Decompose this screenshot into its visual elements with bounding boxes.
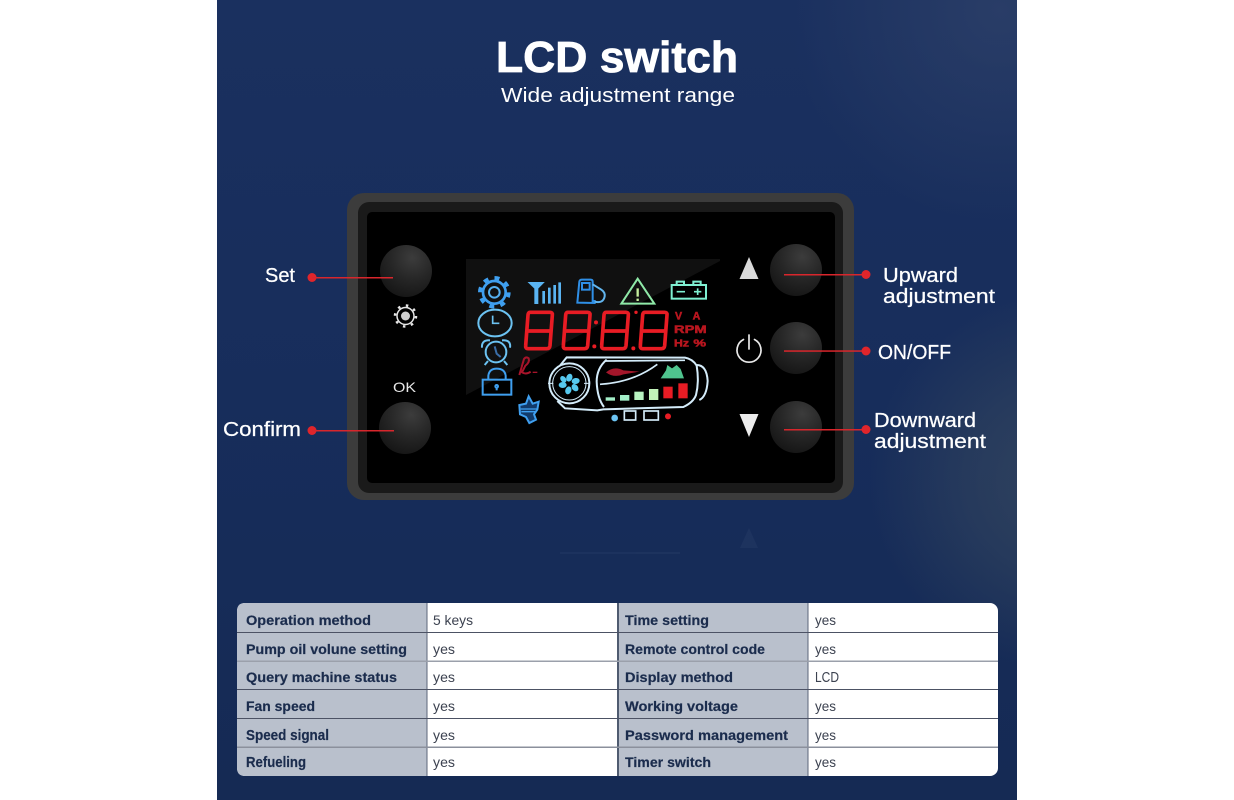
unit labels: Hz xyxy=(674,338,689,349)
callout: ON/OFF xyxy=(784,342,951,364)
level bars xyxy=(606,383,688,401)
unit labels: % xyxy=(693,338,706,349)
button: on/off xyxy=(770,322,822,374)
left value column: yes xyxy=(433,727,455,743)
icon: down arrow xyxy=(740,414,758,437)
callout: ON/OFF: ON/OFF xyxy=(878,342,951,364)
icon: signal xyxy=(528,282,560,304)
callout: Downward adjustment: adjustment xyxy=(874,431,986,453)
right label column: Password management xyxy=(625,727,788,743)
left label column: Query machine status xyxy=(246,669,397,685)
background panel xyxy=(217,0,1017,800)
unit labels: A xyxy=(693,310,701,322)
left value column: 5 keys xyxy=(433,612,473,628)
icon: clock xyxy=(478,310,512,336)
icon: fuel drop symbol xyxy=(519,396,539,423)
callout: Confirm: Confirm xyxy=(223,419,301,441)
icon: settings gear xyxy=(395,306,416,326)
unit labels: V xyxy=(675,310,683,322)
spec table xyxy=(237,603,998,776)
icon: gear xyxy=(480,278,509,307)
left label column xyxy=(246,612,407,771)
right label column: Remote control code xyxy=(625,641,765,657)
device housing xyxy=(347,193,854,500)
icon: battery xyxy=(672,282,706,299)
left label column: Refueling xyxy=(246,755,306,771)
right value column: yes xyxy=(815,612,836,628)
right value column: yes xyxy=(815,727,836,743)
right label column: Timer switch xyxy=(625,754,711,770)
left label column: Pump oil volune setting xyxy=(246,641,407,657)
LCD screen xyxy=(466,259,720,423)
table background xyxy=(237,603,998,776)
icon: lock xyxy=(483,369,511,395)
right label column xyxy=(625,612,788,770)
heater diagram xyxy=(548,357,708,421)
subtitle: Wide adjustment range xyxy=(501,84,735,107)
red heat glyph xyxy=(519,357,537,375)
callout: Set: Set xyxy=(265,265,295,287)
icon: alarm clock xyxy=(482,340,510,365)
callout: Upward adjustment xyxy=(784,265,995,308)
left value column: yes xyxy=(433,641,455,657)
right label column: Display method xyxy=(625,669,733,685)
left value column: yes xyxy=(433,698,455,714)
button: set xyxy=(380,245,432,297)
left label column: Fan speed xyxy=(246,698,315,714)
callout: Downward adjustment xyxy=(784,410,986,453)
OK label: OK xyxy=(393,379,417,395)
icon: warning triangle xyxy=(621,279,654,304)
right value column: LCD xyxy=(815,670,839,686)
green icon xyxy=(661,365,684,378)
left label column: Operation method xyxy=(246,612,371,628)
callout: Confirm xyxy=(223,419,394,441)
left value column: yes xyxy=(433,669,455,685)
callout: Upward adjustment: adjustment xyxy=(883,286,995,308)
flame xyxy=(606,368,639,376)
right value column: yes xyxy=(815,641,836,657)
right label column: Time setting xyxy=(625,612,709,628)
callout: Upward adjustment: Upward xyxy=(883,265,958,287)
title: LCD switch xyxy=(496,33,738,82)
left value column xyxy=(433,612,473,770)
button: upward xyxy=(770,244,822,296)
icon: fuel pump xyxy=(577,280,605,303)
left label column: Speed signal xyxy=(246,728,329,744)
callout: Downward adjustment: Downward xyxy=(874,410,976,432)
seven segment digits xyxy=(526,311,667,350)
faint device reflection xyxy=(560,528,758,554)
device: LCD controller xyxy=(347,193,854,500)
fan blades xyxy=(559,373,580,395)
unit labels xyxy=(674,310,707,349)
left value column: yes xyxy=(433,754,455,770)
icon: up arrow xyxy=(740,257,758,279)
right value column: yes xyxy=(815,698,836,714)
right value column xyxy=(815,612,839,770)
right label column: Working voltage xyxy=(625,698,738,714)
button: confirm xyxy=(379,402,431,454)
callout: Set xyxy=(265,265,393,287)
indicator dots xyxy=(611,415,618,421)
icon: power xyxy=(737,335,761,362)
unit labels: RPM xyxy=(674,324,707,336)
right value column: yes xyxy=(815,754,836,770)
button: downward xyxy=(770,401,822,453)
